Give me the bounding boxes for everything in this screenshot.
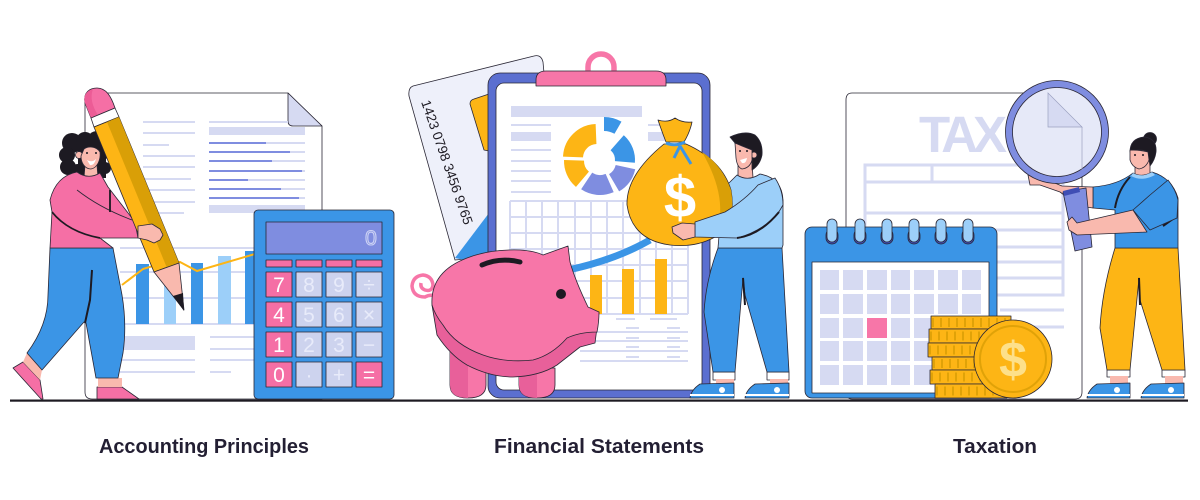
calculator: 6: [333, 304, 345, 327]
calculator: 1: [273, 334, 285, 357]
lower arm: [1067, 210, 1147, 235]
calculator: 8: [303, 274, 315, 297]
calculator: 0: [273, 364, 285, 387]
document: [85, 93, 322, 399]
character: woman with pencil: [13, 88, 184, 399]
calculator: 0: [365, 227, 377, 250]
icon: giant pencil: [84, 88, 184, 311]
hand: [138, 224, 163, 243]
calculator: 2: [303, 334, 315, 357]
piggy bank: [412, 246, 599, 398]
caption: financial statements: Financial Statements: [494, 436, 704, 458]
card number: 1423 0798 3456 9765: [418, 98, 476, 227]
icon: coin stack: [928, 316, 1052, 398]
tax document: [846, 93, 1082, 399]
calculator: 3: [333, 334, 345, 357]
calculator: +: [333, 364, 345, 387]
torso: [1093, 172, 1178, 248]
calculator: 7: [273, 274, 285, 297]
calendar: [805, 219, 997, 398]
panel: taxation: [805, 80, 1185, 399]
bar chart with line: [122, 251, 257, 324]
calculator: ×: [363, 304, 375, 327]
grid chart: [510, 201, 688, 361]
tax heading: TAX: [919, 106, 1007, 163]
calculator: ÷: [363, 274, 375, 297]
calculator: 4: [273, 304, 285, 327]
panel: financial statements: [409, 54, 789, 398]
ground line: [10, 400, 1188, 402]
caption: taxation: Taxation: [953, 436, 1037, 458]
arm and hand: [695, 178, 783, 238]
calculator: ·: [306, 364, 312, 387]
icon: coin stack: $: [999, 332, 1027, 388]
icon: money bag: [627, 118, 732, 246]
character: man with money bag: [627, 118, 789, 398]
calculator: 9: [333, 274, 345, 297]
calculator: −: [363, 334, 375, 357]
sleeve: [1133, 180, 1178, 230]
calculator: =: [363, 364, 375, 387]
hair: [59, 131, 111, 180]
donut chart: [564, 124, 635, 195]
character: woman with magnifying glass: [1006, 80, 1185, 398]
calculator: [254, 210, 394, 399]
icon: magnifying glass: [1006, 80, 1108, 251]
caption: accounting principles: Accounting Principles: [99, 436, 309, 458]
credit card: [409, 56, 560, 265]
calculator: 5: [303, 304, 315, 327]
clipboard: [488, 54, 710, 398]
panel: accounting principles: [13, 88, 394, 399]
upper arm: [1028, 175, 1093, 208]
icon: money bag: $: [664, 165, 696, 230]
